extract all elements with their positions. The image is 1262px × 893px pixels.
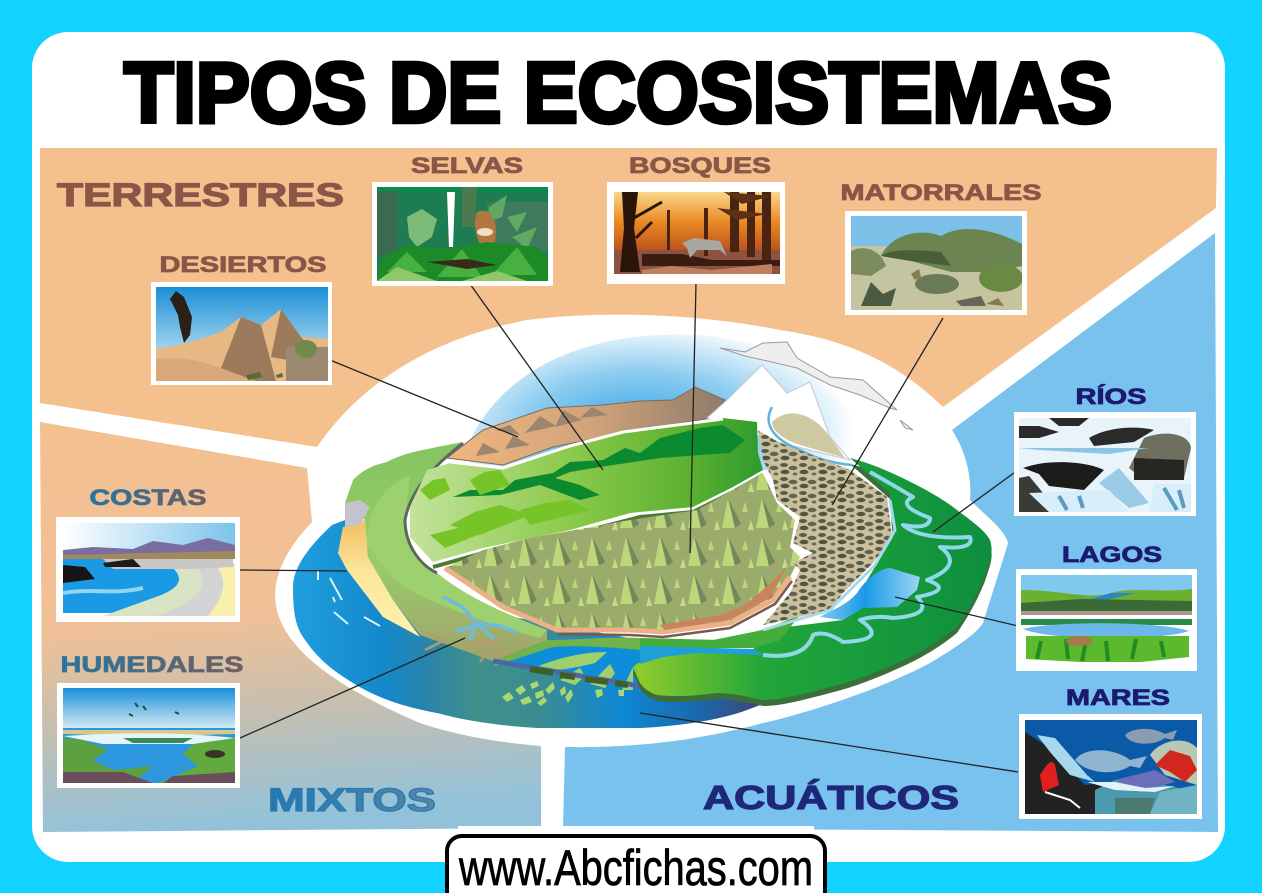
bosque peach edge xyxy=(445,568,790,632)
frame xyxy=(372,182,553,286)
sky glow xyxy=(470,334,875,470)
frame xyxy=(1019,714,1202,819)
frame xyxy=(1016,569,1197,671)
label: RÍOS xyxy=(1076,384,1146,409)
delta channel xyxy=(493,645,640,688)
upper green strip xyxy=(640,615,800,648)
photo xyxy=(1019,418,1191,512)
jungle ferns xyxy=(420,470,590,548)
heading: terrestres: TERRESTRES xyxy=(57,177,344,213)
delta islets xyxy=(502,681,624,706)
photo xyxy=(63,688,235,783)
river xyxy=(763,472,971,656)
frame xyxy=(56,517,240,622)
panel: acuaticos xyxy=(563,233,1218,832)
photo xyxy=(156,287,328,381)
frame xyxy=(151,282,332,385)
inner plain band xyxy=(367,475,547,638)
jungle veins xyxy=(453,425,745,500)
cloud xyxy=(720,342,913,430)
panel: mixtos xyxy=(40,422,541,832)
lowland shadow xyxy=(633,464,992,706)
heading: mixtos: MIXTOS xyxy=(268,782,436,818)
bosque trees xyxy=(445,473,800,632)
blue channel xyxy=(640,646,764,664)
beach xyxy=(338,520,420,637)
wetland stream xyxy=(443,597,517,640)
matorral xyxy=(758,430,892,625)
card: lagos xyxy=(1016,542,1197,671)
photo xyxy=(614,192,780,274)
frame xyxy=(57,683,240,788)
label: MATORRALES xyxy=(840,180,1042,205)
card: mares xyxy=(1019,685,1202,819)
selva xyxy=(410,418,763,562)
heading: acuaticos: ACUÁTICOS xyxy=(703,779,959,816)
delta mud bars xyxy=(530,669,628,685)
sea foam xyxy=(318,570,380,626)
card: desiertos xyxy=(151,252,332,385)
delta barrier band xyxy=(493,661,640,686)
card: costas xyxy=(56,485,240,622)
coast shoreline xyxy=(405,443,463,573)
label: SELVAS xyxy=(411,153,523,178)
dunes xyxy=(476,407,608,456)
frame xyxy=(607,182,785,284)
delta marsh strip xyxy=(493,628,780,666)
cliff xyxy=(345,500,370,527)
title: TIPOS DE ECOSISTEMAS xyxy=(124,46,1112,141)
mountain foothills xyxy=(772,413,845,458)
label: LAGOS xyxy=(1062,542,1162,567)
card: humedales xyxy=(57,652,244,788)
panel: terrestres xyxy=(40,148,1217,447)
coastal plain xyxy=(345,442,547,661)
wetland mud xyxy=(425,632,515,662)
leader lines xyxy=(240,283,1018,772)
selva shadow xyxy=(433,475,763,567)
selva white path xyxy=(450,419,723,468)
card: bosques xyxy=(607,153,785,284)
frame xyxy=(845,211,1027,315)
photo xyxy=(63,523,235,616)
website badge xyxy=(447,826,825,893)
card: matorrales xyxy=(840,180,1042,315)
label: COSTAS xyxy=(90,485,206,510)
lake xyxy=(820,568,920,620)
mountains xyxy=(707,365,850,460)
photo xyxy=(851,216,1022,310)
delta land xyxy=(530,652,633,690)
frame xyxy=(1014,412,1196,516)
label: MARES xyxy=(1066,685,1170,710)
card: rios xyxy=(1014,384,1196,516)
bosque brown rim xyxy=(557,581,792,637)
badge box xyxy=(447,836,825,893)
photo xyxy=(377,187,548,281)
badge halo xyxy=(458,826,814,836)
label: HUMEDALES xyxy=(60,652,244,677)
bosque brown slope xyxy=(660,565,788,630)
lowland xyxy=(633,458,992,700)
photo xyxy=(1025,720,1197,814)
diagram: central island xyxy=(293,334,992,728)
matorral river edge xyxy=(763,500,895,630)
card: selvas xyxy=(372,153,553,286)
photo xyxy=(1021,575,1192,662)
mountain stream xyxy=(769,407,852,465)
label: DESIERTOS xyxy=(160,252,326,277)
desert xyxy=(447,387,725,465)
sea xyxy=(293,520,800,728)
label: BOSQUES xyxy=(629,153,771,178)
